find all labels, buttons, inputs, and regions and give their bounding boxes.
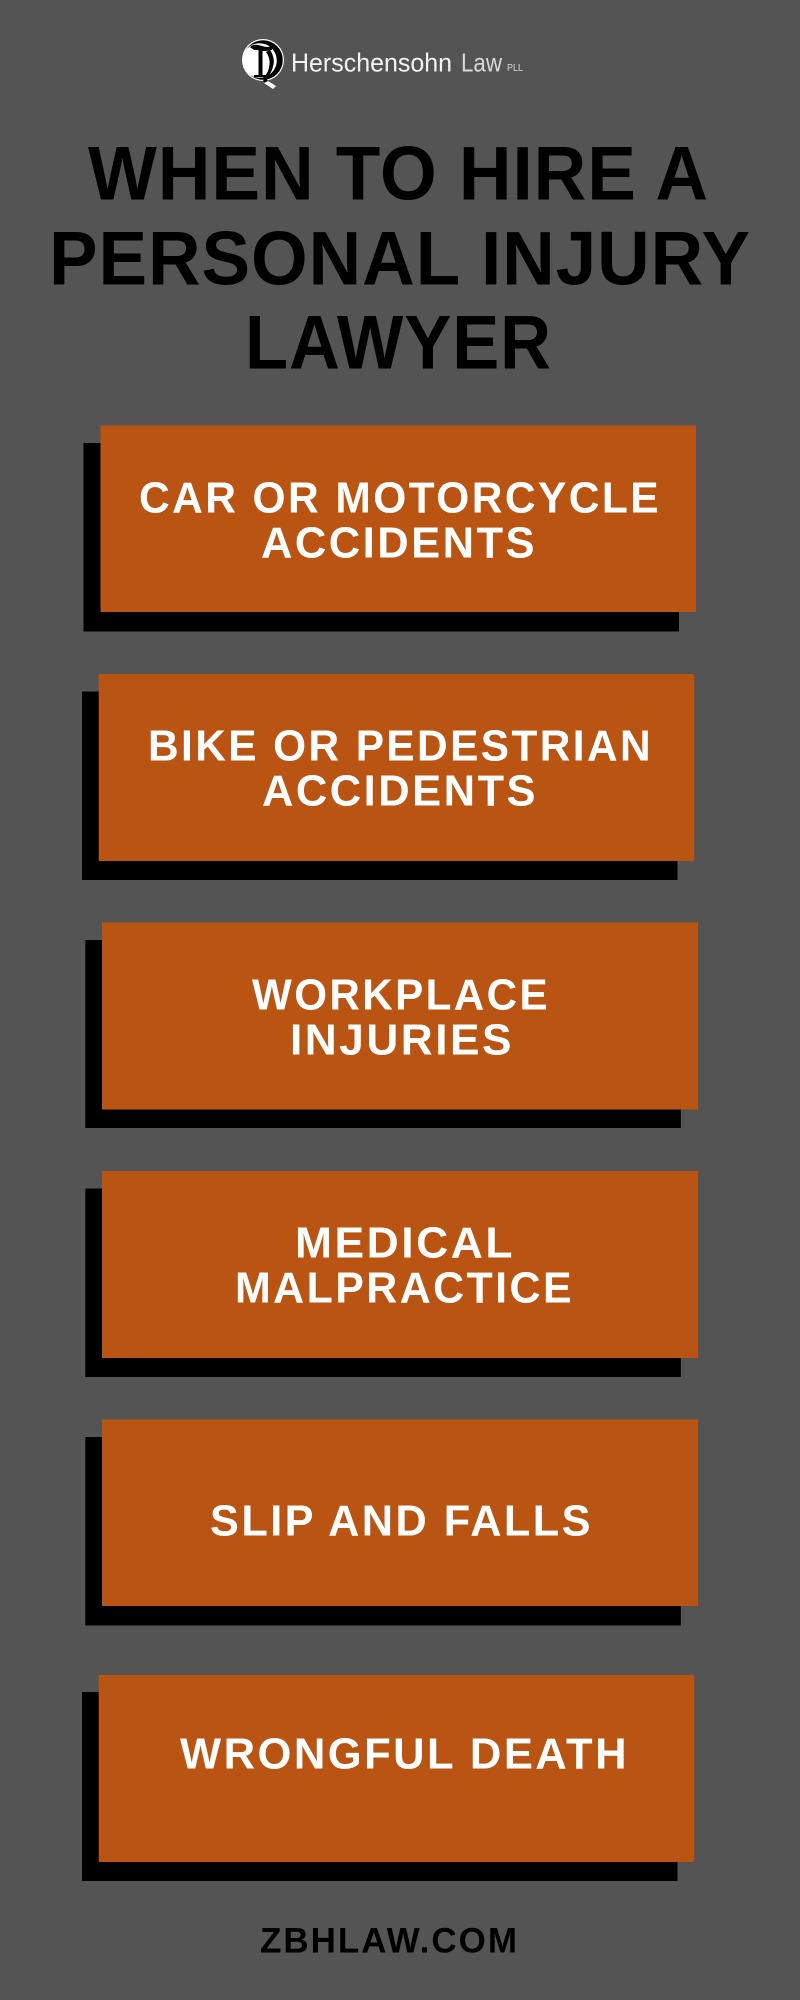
logo wordmark: PLL [507,63,523,74]
title: LAWYER [245,300,552,386]
panel: bike or pedestrian accidents: ACCIDENTS [262,766,538,816]
panel: car or motorcycle accidents: CAR OR MOTORCYCLE [139,474,661,522]
panel: workplace injuries [85,922,698,1128]
panel: slip and falls: SLIP AND FALLS [210,1496,593,1546]
panel: slip and falls [85,1420,698,1626]
panel: car or motorcycle accidents: ACCIDENTS [261,518,537,568]
title: WHEN TO HIRE A [88,132,709,216]
footer website: ZBHLAW.COM [260,1922,519,1960]
panel: bike or pedestrian accidents [82,674,694,880]
panel: workplace injuries: INJURIES [290,1016,514,1064]
logo: Herschensohn Law PLL [242,39,523,89]
panel: medical malpractice: MEDICAL [295,1218,515,1268]
panel: workplace injuries: WORKPLACE [252,970,550,1020]
panel: medical malpractice: MALPRACTICE [235,1264,574,1312]
panel: car or motorcycle accidents [84,426,696,632]
logo wordmark: Law [461,48,502,78]
panel: medical malpractice [85,1171,698,1377]
logo wordmark: Herschensohn [291,48,452,78]
panel: bike or pedestrian accidents: BIKE OR PEDESTRIAN [148,722,653,770]
title [49,132,751,386]
panel: wrongful death: WRONGFUL DEATH [180,1730,629,1778]
panel: wrongful death [82,1675,694,1881]
title: PERSONAL INJURY [49,216,751,302]
icon: circular monogram seal [242,39,284,89]
